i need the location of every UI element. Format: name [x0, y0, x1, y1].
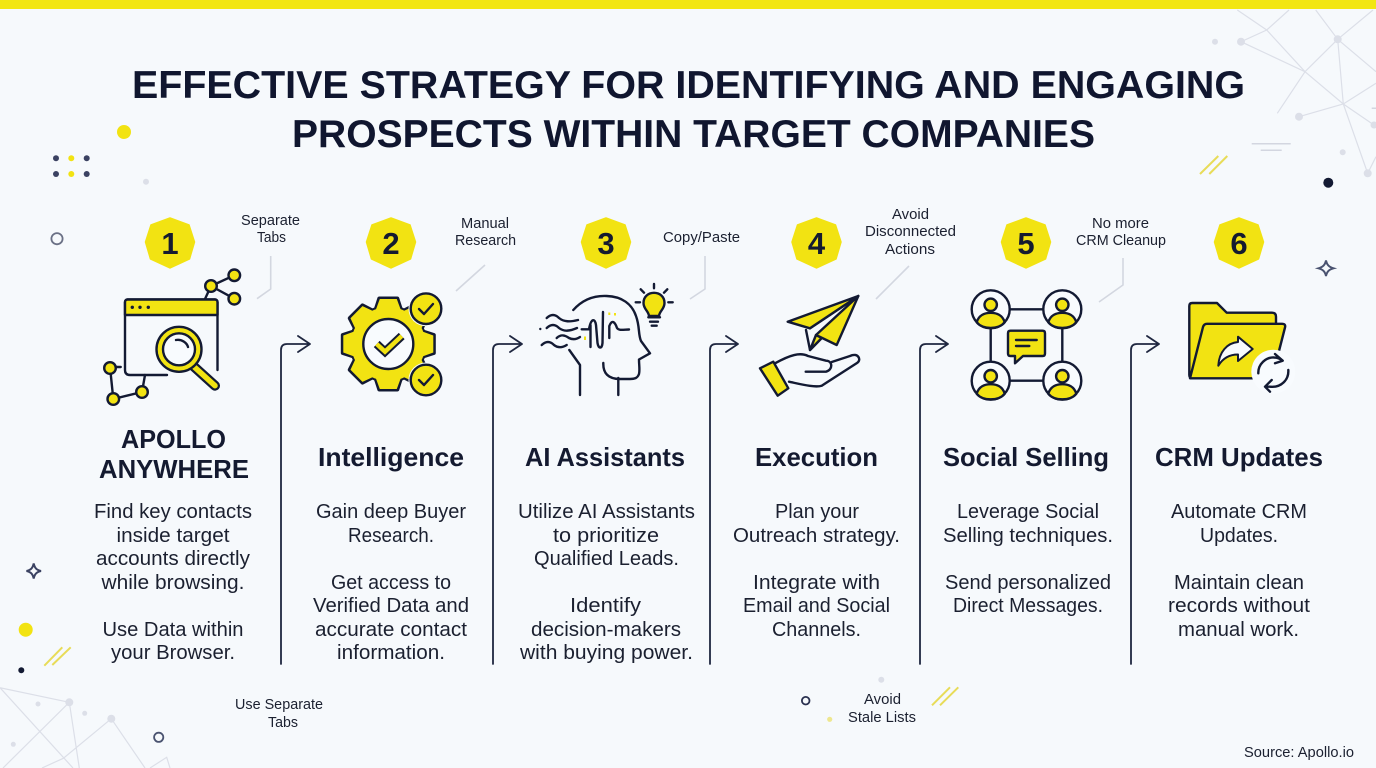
- badge 3: 3: [597, 226, 615, 261]
- heading: APOLLO: [121, 424, 226, 454]
- body text: information.: [337, 642, 445, 664]
- panel: step 1 Apollo Anywhere: [94, 213, 300, 664]
- body text: accurate contact: [315, 619, 467, 641]
- arrow: step 2 to 3: [493, 336, 522, 664]
- callout: copy paste: [663, 230, 740, 299]
- callout: copy paste: Copy/Paste: [663, 230, 740, 246]
- body text: Qualified Leads.: [534, 548, 679, 570]
- icon: browser with magnifier and network: [104, 270, 240, 405]
- body text: while browsing.: [100, 572, 244, 594]
- icon: connected people with chat bubble: [972, 290, 1081, 400]
- icon: paper plane over open hand: [760, 296, 859, 396]
- heading: Social Selling: [943, 442, 1109, 472]
- body text: [94, 501, 252, 664]
- body text: Leverage Social: [957, 501, 1099, 523]
- body text: inside target: [116, 525, 230, 547]
- decoration: upper left dots: [51, 125, 149, 244]
- body text: Direct Messages.: [953, 595, 1103, 617]
- badge 4: 4: [808, 226, 826, 261]
- body text: manual work.: [1178, 619, 1299, 641]
- body text: [518, 501, 695, 664]
- body text: [943, 501, 1113, 617]
- callout: no more CRM cleanup: No more: [1092, 216, 1149, 232]
- heading: CRM Updates: [1155, 442, 1323, 472]
- body text: Updates.: [1200, 525, 1278, 547]
- body text: [1168, 501, 1310, 641]
- arrow: step 1 to 2: [281, 336, 310, 664]
- heading: ANYWHERE: [99, 454, 249, 484]
- note: use separate tabs: [235, 697, 323, 731]
- body text: Verified Data and: [313, 595, 469, 617]
- body text: Channels.: [772, 619, 861, 641]
- source: Source: Apollo.io: [1244, 745, 1354, 761]
- badge 6: 6: [1230, 226, 1248, 261]
- callout: separate tabs: [241, 213, 300, 299]
- body text: accounts directly: [96, 548, 250, 570]
- body text: Plan your: [775, 501, 859, 523]
- body text: Send personalized: [945, 572, 1111, 594]
- body text: Maintain clean: [1174, 572, 1304, 594]
- panel: step 5 Social Selling: [943, 216, 1166, 617]
- badge 1: 1: [161, 226, 179, 261]
- title: EFFECTIVE STRATEGY FOR IDENTIFYING AND ENGAGING: [132, 64, 1245, 107]
- body text: Outreach strategy.: [733, 525, 900, 547]
- note: avoid stale lists: [848, 692, 916, 726]
- icon: folder with sync arrows: [1189, 303, 1295, 394]
- badge 5: 5: [1017, 226, 1035, 261]
- callout: no more CRM cleanup: [1076, 216, 1166, 302]
- body text: Selling techniques.: [943, 525, 1113, 547]
- badge 5: [1002, 218, 1050, 268]
- body text: Gain deep Buyer: [316, 501, 466, 523]
- body text: Find key contacts: [94, 501, 252, 523]
- panel: step 3 AI Assistants: [518, 218, 740, 664]
- arrow: step 4 to 5: [920, 336, 948, 664]
- top accent bar: [0, 0, 1376, 9]
- panel: step 4 Execution: [733, 207, 956, 641]
- badge 4: [792, 218, 841, 268]
- body text: Utilize AI Assistants: [518, 501, 695, 523]
- title: [132, 64, 1245, 156]
- note: use separate tabs: Use Separate: [235, 697, 323, 713]
- body text: Research.: [348, 525, 434, 547]
- callout: avoid disconnected actions: [865, 207, 956, 299]
- body text: Use Data within: [102, 619, 244, 641]
- callout: manual research: Research: [455, 233, 516, 249]
- body text: with buying power.: [519, 642, 693, 664]
- body text: [313, 501, 469, 664]
- title: PROSPECTS WITHIN TARGET COMPANIES: [292, 113, 1095, 156]
- decoration: lower left network: [0, 564, 170, 768]
- callout: separate tabs: Separate: [241, 213, 300, 229]
- body text: to prioritize: [553, 525, 659, 547]
- badge 1: [146, 218, 194, 268]
- body text: Get access to: [331, 572, 451, 594]
- note: avoid stale lists: Stale Lists: [848, 710, 916, 726]
- body text: Email and Social: [743, 595, 890, 617]
- body text: Integrate with: [753, 572, 880, 594]
- body text: [733, 501, 900, 641]
- panel: step 6 CRM Updates: [1155, 218, 1323, 641]
- panel: step 2 Intelligence: [313, 216, 516, 664]
- arrow: step 5 to 6: [1131, 336, 1159, 664]
- decoration: bottom centre shapes: [802, 677, 958, 722]
- callout: separate tabs: Tabs: [257, 230, 286, 246]
- callout: avoid disconnected actions: Actions: [885, 242, 935, 258]
- body text: records without: [1168, 595, 1310, 617]
- body text: Identify: [570, 595, 641, 617]
- body text: your Browser.: [111, 642, 235, 664]
- arrow: step 3 to 4: [710, 336, 738, 664]
- callout: no more CRM cleanup: CRM Cleanup: [1076, 233, 1166, 249]
- note: avoid stale lists: Avoid: [864, 692, 901, 708]
- heading: Intelligence: [318, 442, 464, 472]
- callout: manual research: [455, 216, 516, 291]
- badge 3: [582, 218, 630, 268]
- body text: Automate CRM: [1171, 501, 1307, 523]
- decoration: top right network: [1200, 10, 1376, 276]
- callout: avoid disconnected actions: Avoid: [892, 207, 929, 223]
- icon: head with sound waves and light bulb: [539, 284, 673, 395]
- callout: avoid disconnected actions: Disconnected: [865, 224, 956, 240]
- heading: AI Assistants: [525, 442, 685, 472]
- heading: [99, 424, 249, 484]
- callout: manual research: Manual: [461, 216, 509, 232]
- heading: Execution: [755, 442, 878, 472]
- badge 2: 2: [382, 226, 400, 261]
- badge 6: [1214, 218, 1264, 268]
- badge 2: [366, 218, 416, 268]
- icon: gear with checks: [343, 291, 444, 398]
- note: use separate tabs: Tabs: [268, 715, 298, 731]
- body text: decision-makers: [531, 619, 681, 641]
